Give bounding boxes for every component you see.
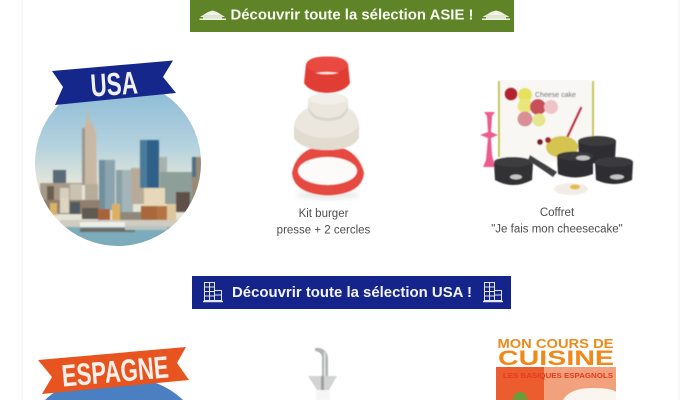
burger kit caption: presse + 2 cercles	[277, 224, 371, 236]
book dish plate	[563, 388, 616, 400]
top red ring	[304, 56, 350, 93]
product: cheesecake box	[480, 80, 633, 236]
cheesecake caption: "Je fais mon cheesecake"	[491, 224, 623, 236]
New York skyline circle	[35, 94, 201, 246]
button label: Asia: Découvrir toute la sélection ASIE !	[230, 6, 474, 24]
book cover right	[544, 367, 616, 400]
icon: building right	[483, 282, 503, 302]
book subtitle: LES BASIQUES ESPAGNOLS	[503, 373, 613, 380]
book title line 2: CUISINE	[498, 347, 614, 370]
Spain ribbon label: ESPAGNE	[60, 349, 170, 394]
Spain blue circle	[45, 376, 183, 400]
book title line 1: MON COURS DE	[498, 337, 614, 351]
white press	[294, 93, 359, 150]
icon: temple left	[200, 10, 226, 20]
black pans	[578, 141, 616, 164]
bottom red ring	[292, 147, 364, 196]
USA ribbon	[52, 60, 176, 105]
product: oil pourer	[308, 348, 337, 400]
illustration: USA city badge	[35, 60, 202, 249]
product: cookbook cover	[496, 337, 616, 400]
product: burger kit	[277, 56, 371, 236]
button: USA selection	[192, 276, 511, 309]
cheesecake box image	[480, 80, 633, 195]
box title: Cheese cake	[535, 92, 576, 99]
icon: building left	[203, 282, 223, 302]
cheesecake caption: Coffret	[540, 207, 575, 219]
burger kit image	[292, 56, 364, 200]
book dish green	[513, 392, 527, 400]
USA ribbon label: USA	[89, 64, 139, 104]
pink press	[480, 112, 498, 167]
illustration: Spain badge	[38, 347, 189, 400]
button label: USA: Découvrir toute la sélection USA !	[232, 284, 472, 301]
icon: temple right	[482, 10, 510, 20]
Spain ribbon	[38, 347, 189, 394]
button: Asia selection	[190, 0, 514, 32]
book cover left	[496, 367, 544, 400]
burger kit caption: Kit burger	[299, 208, 349, 220]
